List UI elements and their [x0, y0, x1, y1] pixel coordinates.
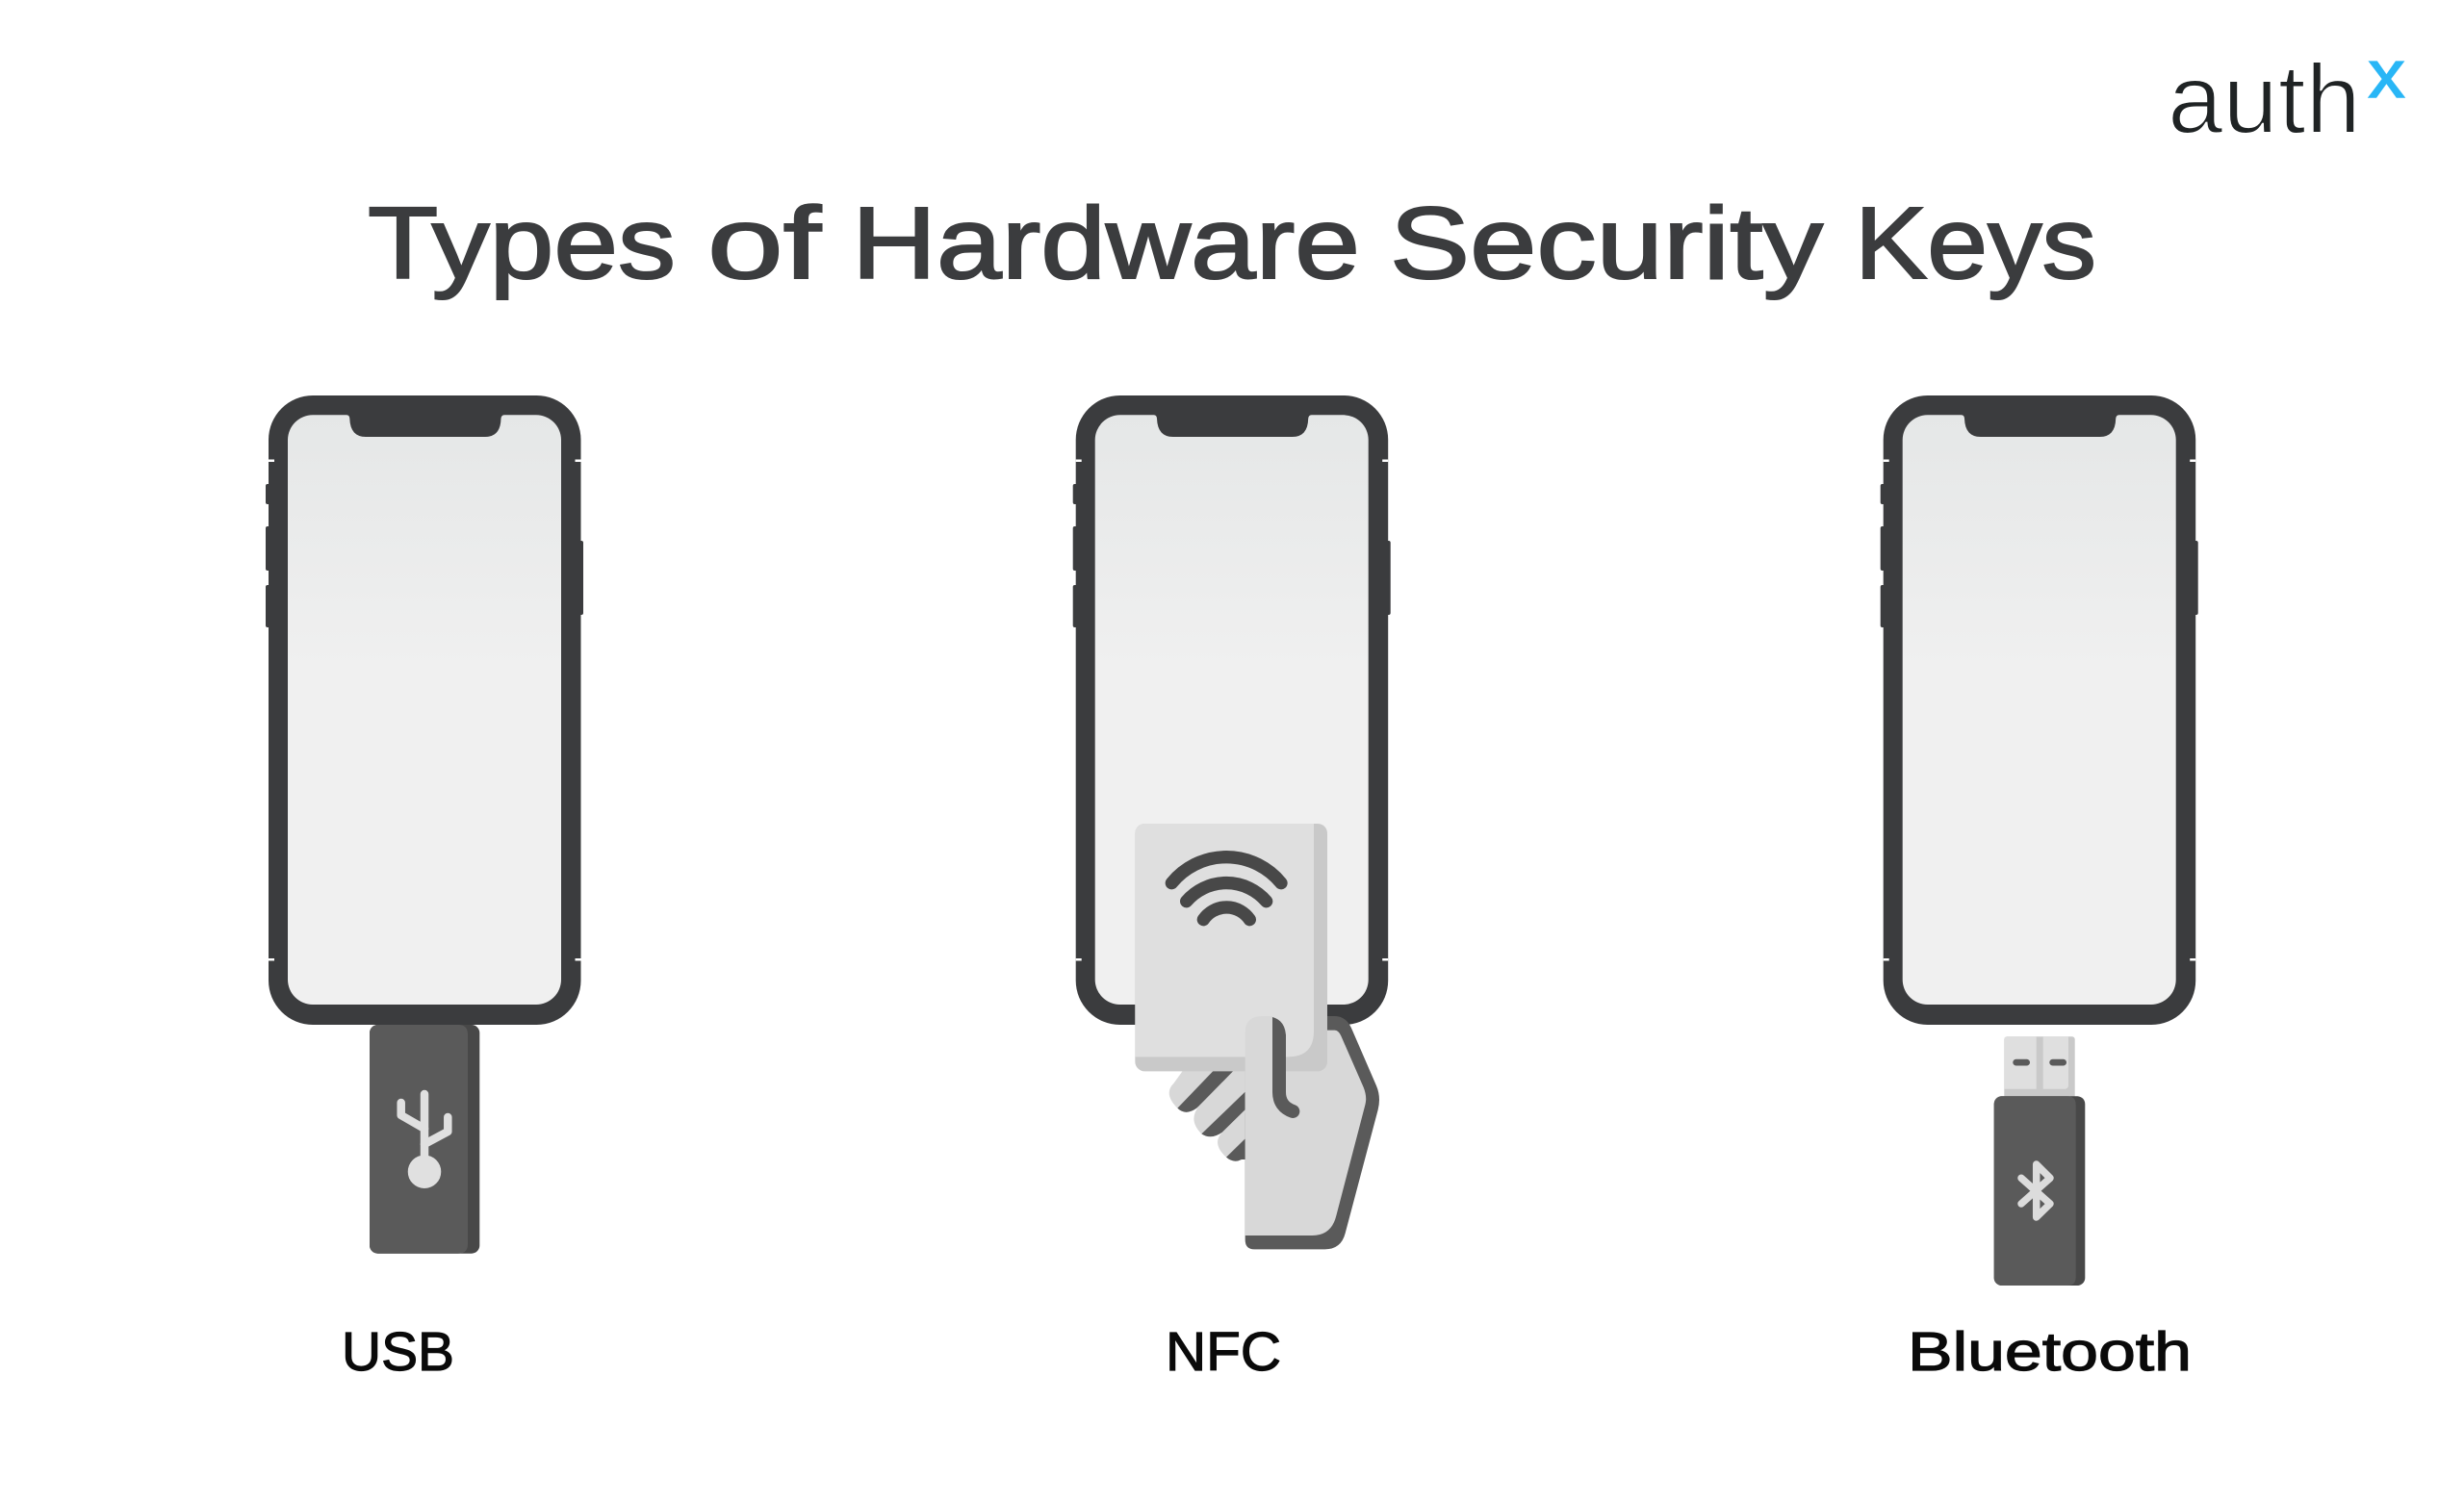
- NFC card: [1135, 824, 1327, 1071]
- hand palm: [1245, 1016, 1379, 1249]
- fingers: [1169, 1065, 1245, 1161]
- phone: Bluetooth column: [1881, 395, 2198, 1025]
- Bluetooth key: [1994, 1036, 2085, 1286]
- thumb: [1245, 1016, 1293, 1113]
- icon: Bluetooth symbol: [2021, 1164, 2050, 1217]
- logo: authx: [2168, 37, 2404, 154]
- title: Types: [368, 187, 676, 300]
- logo wordmark: auth: [2168, 44, 2361, 154]
- USB key: [370, 1025, 479, 1254]
- icon: USB symbol: [401, 1094, 448, 1185]
- title: of: [707, 187, 822, 300]
- key body: [370, 1025, 479, 1254]
- phone: NFC column: [1073, 395, 1391, 1025]
- icon: NFC waves: [1171, 857, 1281, 920]
- USB connector: [2004, 1036, 2075, 1097]
- title: Security: [1390, 187, 1823, 300]
- label: USB: USB: [342, 1321, 454, 1383]
- label: Bluetooth: Bluetooth: [1908, 1321, 2192, 1383]
- phone: USB column: [266, 395, 583, 1025]
- label: NFC: NFC: [1166, 1321, 1281, 1383]
- key body: [1994, 1096, 2085, 1286]
- title: Keys: [1855, 187, 2096, 300]
- title: Hardware: [852, 187, 1360, 300]
- logo superscript x: x: [2368, 37, 2404, 112]
- NFC card held in hand: [1135, 824, 1379, 1249]
